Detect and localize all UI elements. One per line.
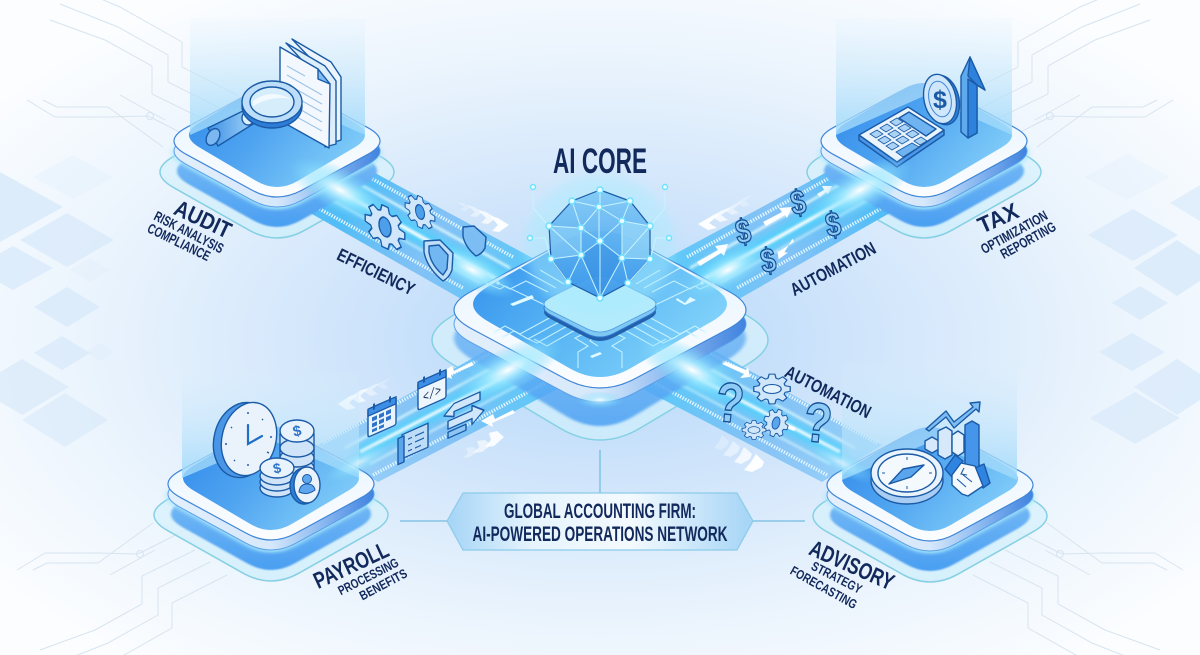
label: advisory: FORECASTING bbox=[788, 563, 860, 612]
background diamonds right bbox=[1084, 154, 1200, 444]
panel: advisory platform bbox=[826, 362, 1034, 571]
icon: question marks and gears bbox=[713, 370, 835, 455]
label: tax: REPORTING bbox=[997, 218, 1059, 262]
panel: AI core platform bbox=[454, 175, 746, 426]
platform base bbox=[167, 426, 375, 570]
label: payroll: PROCESSING bbox=[335, 555, 401, 598]
icon: clock bbox=[206, 396, 284, 484]
icon: dollars bbox=[732, 183, 844, 281]
label: payroll: BENEFITS bbox=[357, 565, 410, 603]
icon: calculator bbox=[859, 107, 944, 167]
label: payroll bbox=[309, 536, 410, 603]
glass column bbox=[190, 18, 365, 135]
trace sparkles bbox=[493, 281, 707, 358]
icon: compass bbox=[871, 449, 943, 504]
icon: gears efficiency bbox=[365, 190, 435, 257]
panel: tax platform bbox=[820, 18, 1028, 227]
label: advisory: STRATEGY bbox=[809, 558, 865, 597]
beam-end glows bbox=[278, 143, 922, 491]
label: efficiency: EFFICIENCY bbox=[334, 245, 418, 299]
platform wall bbox=[454, 246, 746, 402]
label: automation top: AUTOMATION bbox=[787, 238, 879, 300]
icon: question marks and gears: ? bbox=[713, 370, 747, 435]
icon: shields bbox=[424, 226, 486, 281]
chevrons bottom right bbox=[714, 435, 764, 472]
banner: network title: AI-POWERED OPERATIONS NETWORK bbox=[472, 523, 728, 546]
platform base bbox=[173, 83, 381, 227]
chevrons top left bbox=[457, 202, 509, 232]
icon: bar chart bbox=[925, 421, 979, 473]
label: advisory: ADVISORY bbox=[806, 535, 898, 595]
label: audit: COMPLIANCE bbox=[145, 220, 213, 264]
icon: question marks and gears: ? bbox=[801, 390, 835, 455]
icon: dollars: $ bbox=[787, 183, 809, 223]
label: audit: AUDIT bbox=[170, 195, 236, 243]
platform inner bbox=[473, 231, 727, 377]
glass column bbox=[842, 362, 1017, 480]
icon: magnifying glass bbox=[203, 81, 302, 148]
platform base plates bbox=[154, 106, 1047, 582]
icon: documents bbox=[280, 39, 341, 148]
icon: dollars: $ bbox=[732, 212, 754, 252]
glass column bbox=[836, 18, 1012, 135]
circuit traces bbox=[486, 268, 714, 368]
glass column bbox=[182, 372, 359, 478]
platform shadow bbox=[454, 250, 746, 426]
connector lines to banner bbox=[400, 450, 805, 521]
panel: payroll platform bbox=[167, 372, 375, 570]
icon: coin stack small: $ bbox=[272, 459, 283, 477]
beam: advisory to core bbox=[635, 340, 882, 482]
circuit lines bottom right bbox=[973, 523, 1183, 655]
panel: audit platform bbox=[173, 18, 381, 227]
label: payroll: PAYROLL bbox=[309, 536, 393, 594]
label: audit: RISK ANALYSIS bbox=[152, 208, 226, 256]
icon: employee coin bbox=[290, 467, 320, 504]
icon: dollars: $ bbox=[757, 241, 779, 281]
platform base bbox=[826, 427, 1034, 571]
neural polyhedron glow bbox=[525, 175, 675, 315]
circuit lines top left bbox=[27, 0, 237, 147]
chevrons bottom left bbox=[338, 378, 504, 458]
icon: coin stack small bbox=[260, 458, 294, 497]
background diamonds left bbox=[0, 155, 115, 447]
chevrons top right bbox=[698, 195, 752, 230]
icon: dollars: $ bbox=[822, 205, 844, 245]
label: automation bottom: AUTOMATION bbox=[782, 362, 874, 422]
icon: up arrow bbox=[961, 57, 985, 138]
label: tax: OPTIMIZATION bbox=[978, 207, 1050, 257]
beam: payroll to core bbox=[318, 340, 565, 482]
platform base bbox=[820, 83, 1028, 227]
icon: handshake bbox=[945, 455, 990, 496]
platform top bbox=[454, 232, 746, 388]
chip bbox=[544, 276, 656, 341]
banner: network title bbox=[447, 493, 753, 550]
neural polyhedron bbox=[528, 184, 672, 301]
icon: calendars and documents: </> bbox=[423, 384, 441, 407]
banner: network title: GLOBAL ACCOUNTING FIRM: bbox=[504, 500, 696, 523]
circuit lines top right bbox=[963, 0, 1173, 147]
icon: coin stack large: $ bbox=[291, 422, 304, 441]
title: AI core: AI CORE bbox=[553, 142, 647, 181]
white flow arrows bbox=[440, 186, 832, 431]
icon: calendars and documents bbox=[368, 367, 484, 465]
beam: audit to core bbox=[298, 166, 540, 304]
label: advisory bbox=[788, 535, 898, 612]
label: audit bbox=[145, 195, 236, 264]
label: tax: TAX bbox=[974, 197, 1023, 238]
circuit lines bottom left bbox=[17, 523, 227, 655]
icon: trend arrow bbox=[926, 402, 980, 431]
beam: tax to core bbox=[660, 166, 902, 304]
icon: coin stack large bbox=[280, 420, 314, 487]
icon: dollar coin: $ bbox=[933, 86, 947, 114]
icon: dollar coin bbox=[919, 71, 964, 128]
